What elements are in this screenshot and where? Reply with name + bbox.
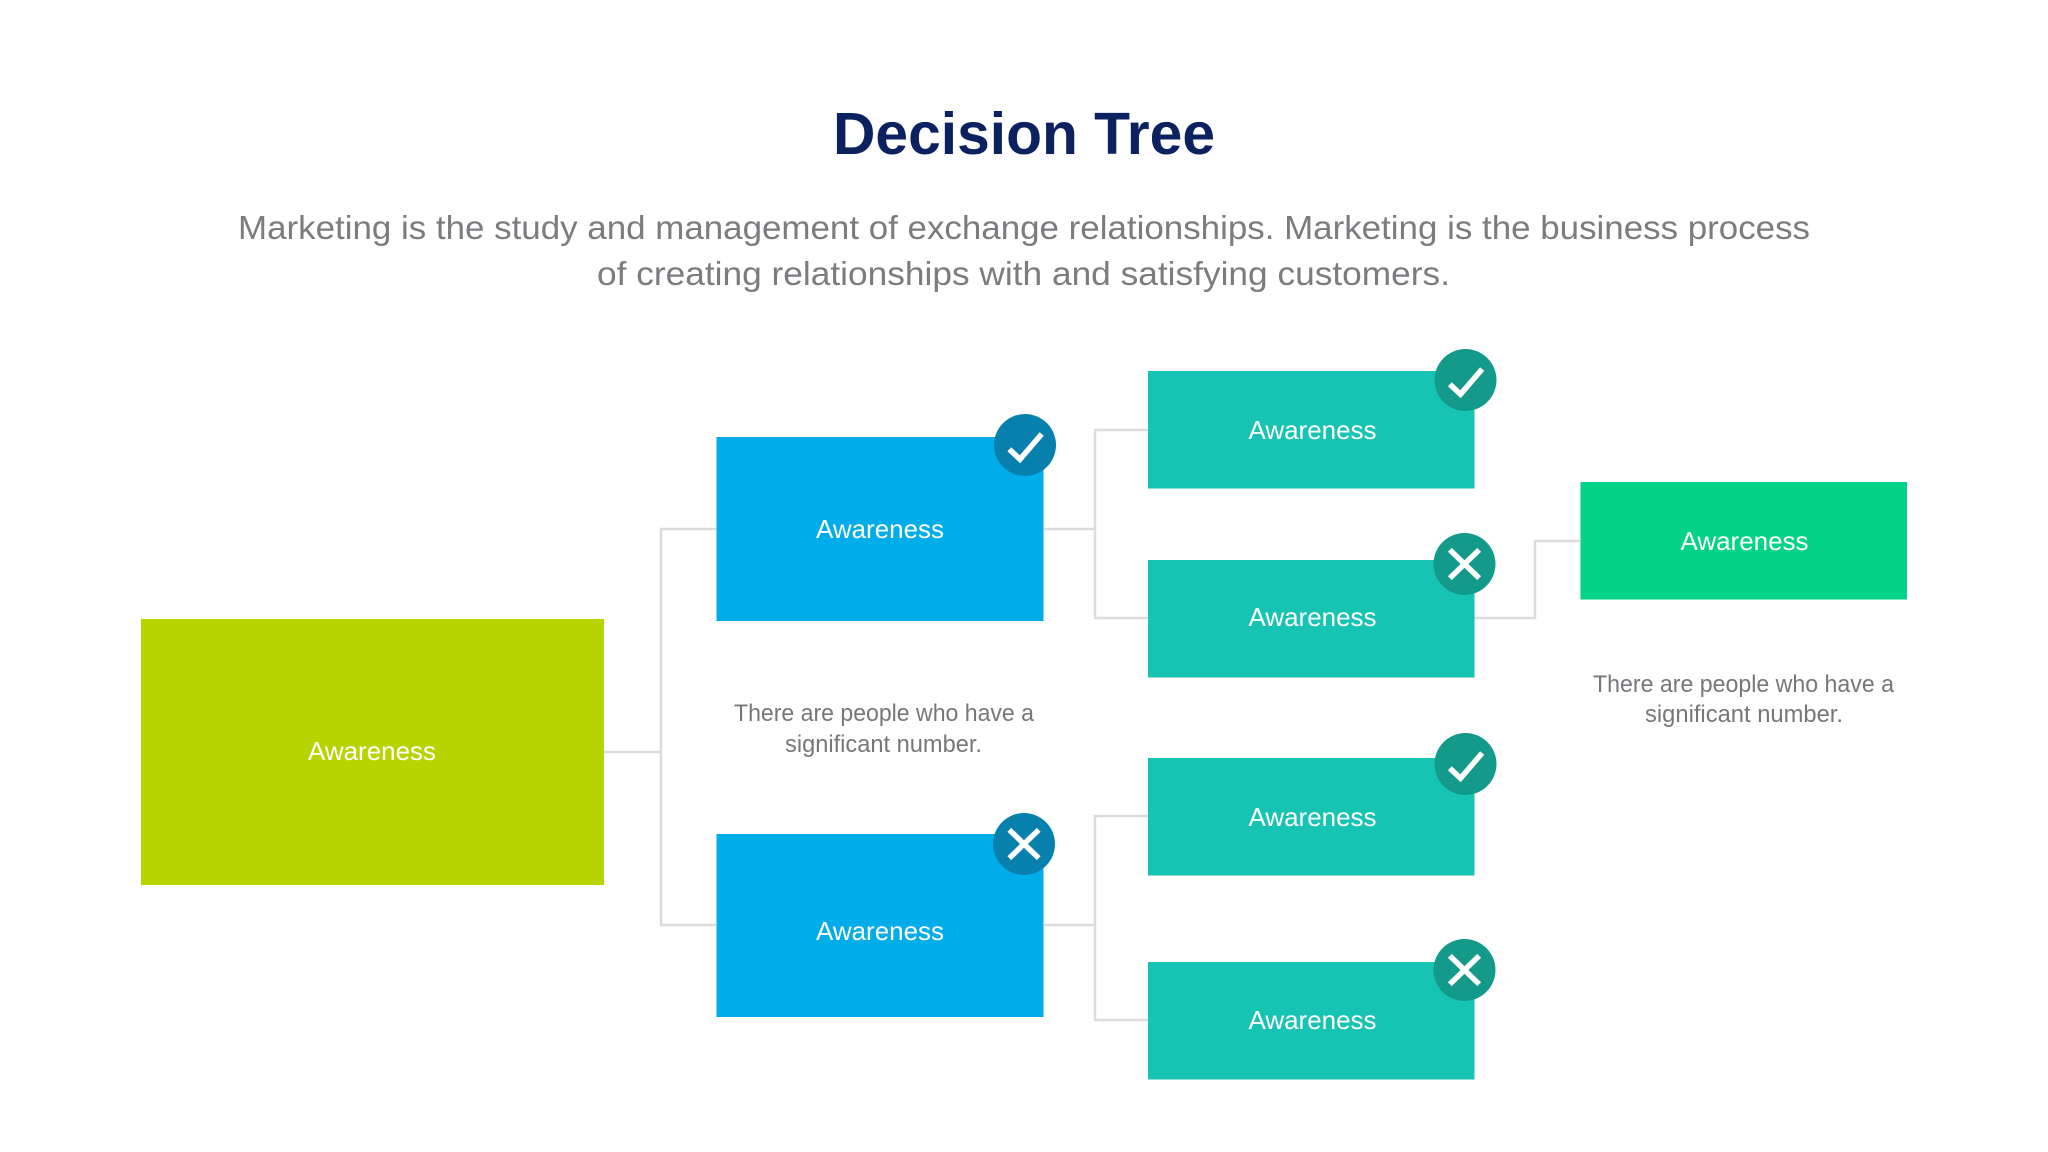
blue box: no branch: Awareness [816,916,944,946]
teal box 2 [1148,533,1496,678]
subtitle: Marketing is the study and management of exchange relationships. Marketing is the business process [238,209,1810,246]
subtitle: of creating relationships with and satisfying customers. [597,255,1450,292]
teal box 1 [1148,349,1496,488]
caption: centre [734,700,1035,758]
caption: right: There are people who have a [1593,671,1895,698]
caption: right [1593,671,1895,728]
teal box 2: Awareness [1248,602,1376,632]
caption: right: significant number. [1645,701,1843,728]
caption: centre: There are people who have a [734,700,1035,727]
teal box 3 [1148,733,1496,876]
blue box: no branch [716,813,1055,1017]
blue box: yes branch: Awareness [816,514,944,544]
root box [141,619,604,885]
root box: Awareness [308,736,436,766]
teal box 1: Awareness [1248,415,1376,445]
green outcome box: Awareness [1680,526,1808,556]
subtitle [238,209,1810,292]
teal box 3: Awareness [1248,802,1376,832]
green outcome box [1580,482,1907,600]
connector lines [604,430,1580,1020]
teal box 4: Awareness [1248,1005,1376,1035]
title: Decision Tree [833,101,1215,167]
caption: centre: significant number. [785,731,982,758]
teal box 4 [1148,939,1496,1080]
blue box: yes branch [716,414,1056,621]
